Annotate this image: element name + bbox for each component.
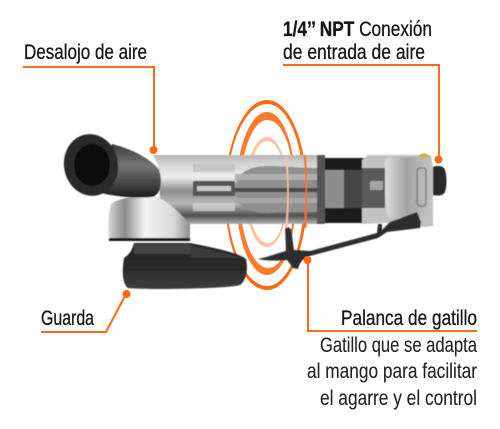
callout: Palanca de gatillo <box>304 256 477 331</box>
air inlet cap <box>433 166 446 196</box>
callout: 1/4 NPT Conexion de entrada de aire <box>283 18 442 164</box>
description text <box>307 334 477 410</box>
head bell <box>108 196 190 239</box>
yellow valve <box>419 154 429 158</box>
guard <box>123 243 247 289</box>
callout: Desalojo de aire: Desalojo de aire <box>24 41 147 64</box>
black collar <box>317 155 325 224</box>
callout: 1/4 NPT Conexion de entrada de aire: de entrada de aire <box>283 41 425 64</box>
side handle <box>90 144 161 198</box>
trigger lever <box>258 212 421 269</box>
callout: Guarda <box>41 290 130 332</box>
rear housing <box>362 155 433 227</box>
callout: 1/4 NPT Conexion de entrada de aire: 1/4’’ NPT Conexión <box>283 18 432 41</box>
callout: Guarda: Guarda <box>41 307 94 330</box>
main body <box>153 155 318 224</box>
vibration rings behind tool <box>225 100 307 290</box>
oval window <box>235 166 318 213</box>
air grinder tool <box>59 130 446 289</box>
body slot <box>193 181 235 196</box>
callout: Desalojo de aire <box>23 41 158 154</box>
front ring segments over tool <box>285 157 289 228</box>
